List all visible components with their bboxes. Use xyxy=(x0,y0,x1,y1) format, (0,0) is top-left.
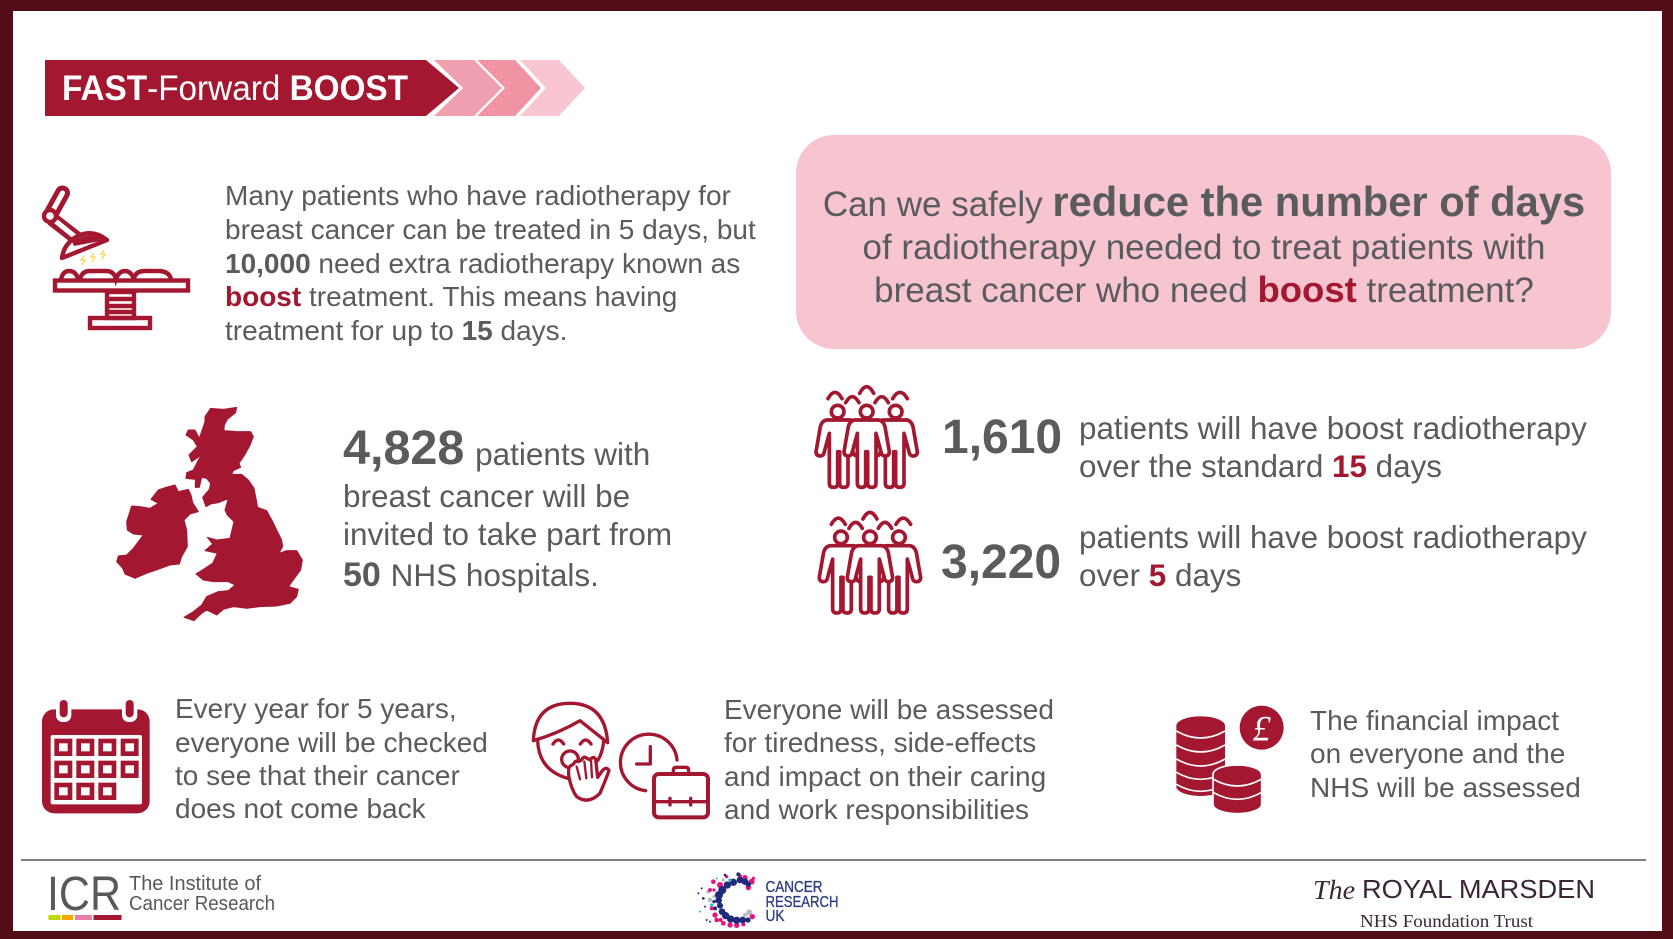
panel: research question xyxy=(796,135,1611,349)
logo: Cancer Research UK: CANCER xyxy=(766,879,822,896)
text: yearly checks: to see that their cancer xyxy=(175,760,460,791)
text: hospitals and patients: patients with xyxy=(466,436,650,472)
logo: Cancer Research UK xyxy=(697,872,838,928)
icon: UK and Ireland map xyxy=(117,407,302,621)
panel: research question: breast cancer who need boost treatment? xyxy=(874,269,1534,310)
intro text: treatment for up to 15 days. xyxy=(225,315,567,346)
icon: coin stacks and pound xyxy=(1176,706,1284,814)
intro text: Many patients who have radiotherapy for xyxy=(225,180,731,211)
text: hospitals and patients: 50 NHS hospitals. xyxy=(343,556,599,594)
icon: calendar xyxy=(42,696,150,813)
intro text xyxy=(225,180,756,346)
icon: radiotherapy machine and table xyxy=(44,193,188,328)
panel: research question: Can we safely reduce the number of days xyxy=(823,178,1585,225)
logo: Institute of Cancer Research xyxy=(47,868,275,921)
text: yearly checks: does not come back xyxy=(175,793,427,824)
text: financial impact: The financial impact xyxy=(1310,705,1559,736)
panel: research question: of radiotherapy needed to treat patients with xyxy=(863,228,1545,267)
intro text: breast cancer can be treated in 5 days, but xyxy=(225,214,756,245)
text: yearly checks: everyone will be checked xyxy=(175,727,488,758)
title banner: FAST-Forward BOOST xyxy=(62,69,408,108)
stat: 3,220 patients: patients will have boost radiotherapy xyxy=(1079,520,1587,555)
icon: coin stacks and pound: £ xyxy=(1253,709,1272,749)
title banner xyxy=(45,60,585,116)
text: financial impact: on everyone and the xyxy=(1310,738,1565,769)
logo: The Royal Marsden xyxy=(1313,874,1595,931)
intro text: boost treatment. This means having xyxy=(225,281,677,312)
text: assessments: for tiredness, side-effects xyxy=(724,727,1036,758)
icon: yawning face, clock and briefcase xyxy=(533,703,708,817)
icon: people group, 5 day arm xyxy=(819,512,921,613)
footer divider xyxy=(21,859,1646,861)
text: yearly checks: Every year for 5 years, xyxy=(175,693,457,724)
text: assessments: and impact on their caring xyxy=(724,761,1046,792)
text: assessments: Everyone will be assessed xyxy=(724,694,1054,725)
logo: Institute of Cancer Research: The Institute of xyxy=(129,873,261,895)
stat: 3,220 patients: 3,220 xyxy=(941,536,1061,589)
stat: 1,610 patients: over the standard 15 days xyxy=(1079,449,1442,484)
stat: 1,610 patients xyxy=(942,411,1587,484)
intro text: 10,000 need extra radiotherapy known as xyxy=(225,248,740,279)
text: hospitals and patients xyxy=(343,421,672,594)
stat: 3,220 patients: over 5 days xyxy=(1079,558,1241,593)
logo: Institute of Cancer Research: ICR xyxy=(47,868,121,921)
text: financial impact: NHS will be assessed xyxy=(1310,772,1581,803)
logo: The Royal Marsden: NHS Foundation Trust xyxy=(1360,911,1533,931)
logo: Cancer Research UK: UK xyxy=(766,908,785,925)
logo: The Royal Marsden: ROYAL MARSDEN xyxy=(1362,874,1595,904)
stat: 1,610 patients: 1,610 xyxy=(942,411,1062,464)
text: hospitals and patients: breast cancer will be xyxy=(343,478,630,514)
stat: 3,220 patients xyxy=(941,520,1587,593)
icon: people group, standard arm xyxy=(816,387,917,487)
logo: Institute of Cancer Research: Cancer Research xyxy=(129,893,275,915)
text: assessments: and work responsibilities xyxy=(724,794,1029,825)
text: hospitals and patients: invited to take part from xyxy=(343,516,672,552)
text: hospitals and patients: 4,828 xyxy=(343,421,464,475)
logo: Cancer Research UK: RESEARCH xyxy=(766,894,838,911)
text: assessments xyxy=(724,694,1054,825)
text: financial impact xyxy=(1310,705,1581,803)
logo: The Royal Marsden: The xyxy=(1313,875,1355,905)
text: yearly checks xyxy=(175,693,488,824)
stat: 1,610 patients: patients will have boost radiotherapy xyxy=(1079,411,1587,446)
